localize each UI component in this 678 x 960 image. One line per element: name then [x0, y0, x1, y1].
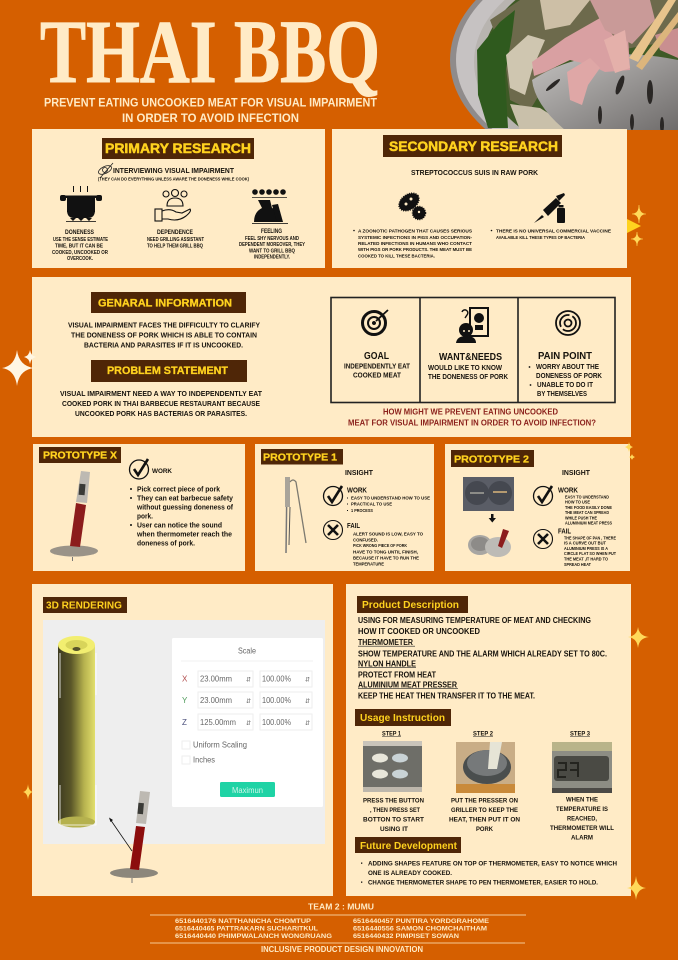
heading: prototype 1 — [261, 449, 343, 464]
step 1: STEP 1 — [382, 732, 402, 738]
axis row y: ⇵ — [305, 699, 310, 705]
text: dependence: NEED GRILLING ASSISTANT — [147, 237, 205, 243]
text: member names left: 6516440176 NATTHANICHA CHOMTUP — [175, 918, 312, 925]
list: future development — [361, 860, 617, 886]
text: pathogen bullet — [353, 228, 473, 260]
subtitle: IN ORDER TO AVOID INFECTION — [122, 113, 299, 125]
text: step 3: ALARM — [571, 834, 593, 842]
text: general information: VISUAL IMPAIRMENT FACES THE DIFFICULTY TO CLARIFY — [68, 320, 260, 330]
arrow: model to product — [109, 818, 132, 851]
heading: prototype x — [39, 447, 121, 463]
text: product description: ALUMINIUM MEAT PRESSER — [358, 680, 457, 690]
text: general information: THE DONENESS OF PORK WHICH IS ABLE TO CONTAIN — [71, 330, 257, 340]
heading: 3d rendering: 3D RENDERING — [46, 600, 122, 612]
text: fail list: THE MEAT ,IT HARD TO — [564, 556, 608, 562]
text: vaccine bullet: THERE IS NO UNIVERSAL COMMERCIAL VACCINE — [496, 228, 612, 234]
icon: check — [130, 459, 148, 479]
text: goal: COOKED MEAT — [353, 372, 402, 380]
icon: syringe and vial — [534, 193, 565, 223]
text: dependence — [147, 229, 205, 250]
sparkles: right and left yellow — [23, 627, 649, 900]
text: product description: KEEP THE HEAT THEN TRANSFER IT TO THE MEAT. — [358, 692, 535, 700]
icon: bacteria — [396, 190, 426, 220]
step 3 — [550, 732, 614, 842]
text: how might we — [348, 408, 596, 428]
text: wants and needs: THE DONENESS OF PORK — [428, 374, 508, 381]
heading: primary research — [102, 138, 254, 159]
checkbox options — [182, 740, 247, 764]
text: insight: INSIGHT — [345, 468, 373, 477]
heading: primary research: PRIMARY RESEARCH — [105, 141, 251, 156]
text: step 2: PORK — [476, 826, 493, 833]
text: interviewing: INTERVIEWING VISUAL IMPAIRMENT — [113, 166, 234, 175]
screenshot: slicer view — [43, 620, 325, 844]
text: fail list: ALUMINIUM PRESS IS A — [564, 546, 609, 551]
text: wants and needs: WOULD LIKE TO KNOW — [428, 365, 502, 372]
text: feeling: INDEPENDENTLY. — [254, 254, 290, 260]
text: pathogen bullet: RELATED INFECTIONS IN HUMANS WHO CONTACT — [358, 241, 472, 247]
list: prototype x findings: when thermometer reach the — [136, 530, 232, 538]
text: feeling: FEEL SHY NERVOUS AND — [245, 236, 299, 242]
heading: secondary research — [383, 135, 562, 157]
text: member names right: 6516440432 PIMPISET SOWAN — [353, 933, 459, 940]
photo: thermometer buttons — [363, 741, 422, 792]
text: dependence: TO HELP THEM GRILL BBQ — [147, 244, 203, 250]
text: work list: HOW TO USE — [565, 500, 590, 504]
text: course name: INCLUSIVE PRODUCT DESIGN INNOVATION — [261, 945, 423, 954]
text: member names right: 6516440457 PUNTIRA YORDGRAHOME — [353, 918, 489, 925]
text: doneness: COOKED, UNCOOKED OR — [52, 250, 108, 256]
heading: problem statement — [91, 360, 247, 382]
text: step 1: PRESS THE BUTTON — [363, 798, 424, 804]
panel: prototype x — [33, 444, 245, 571]
text: product description: HOW IT COOKED OR UNCOOKED — [358, 627, 480, 636]
text: pain point — [529, 351, 602, 398]
text: work list: EASY TO UNDERSTAND — [565, 494, 610, 500]
text: feeling: FEELING — [261, 228, 282, 235]
text: product description: PROTECT FROM HEAT — [358, 670, 436, 680]
heading: general information: GENARAL INFORMATION — [98, 298, 232, 310]
photo: thermometer prototype — [50, 471, 98, 561]
text: product description: SHOW TEMPERATURE AND THE ALARM WHICH ALREADY SET TO 80C. — [358, 650, 607, 658]
text: how might we: HOW MIGHT WE PREVENT EATING UNCOOKED — [383, 408, 558, 416]
step 3: STEP 3 — [570, 732, 591, 738]
text: work list — [558, 486, 612, 526]
text: fail list: PICK WRONG PIECE OF PORK — [353, 543, 407, 549]
text: pathogen bullet: WITH PIGS OR PORK PRODUCTS. THE MEAT MUST BE — [358, 247, 473, 253]
text: work list: 1 PROCESS — [351, 508, 374, 514]
list: prototype x findings: They can eat barbecue safety — [137, 494, 233, 502]
panel: prototype 2 — [445, 444, 630, 571]
axis row y: 100.00% — [262, 696, 291, 705]
text: doneness — [52, 229, 108, 262]
title: THAI BBQ — [40, 3, 380, 102]
scale settings card — [172, 638, 323, 807]
text: fail list: CONFUSED. — [353, 538, 378, 544]
panel: primary research — [32, 129, 325, 268]
heading: secondary research: SECONDARY RESEARCH — [389, 139, 558, 154]
text: doneness: USE THE SENSE ESTIMATE — [53, 237, 108, 243]
text: fail list: BECAUSE IT HAVE TO RUN THE — [353, 556, 420, 562]
heading: prototype 2: PROTOTYPE 2 — [454, 454, 529, 466]
text: general information: BACTERIA AND PARASITES IF IT IS UNCOOKED. — [84, 340, 243, 350]
text: pain point: BY THEMSELVES — [537, 391, 587, 398]
list: future development: CHANGE THERMOMETER SHAPE TO PEN THERMOMETER, EASIER TO HOLD. — [368, 880, 598, 886]
icon: eye crossed — [97, 163, 113, 178]
heading: 3d rendering — [43, 597, 127, 613]
text: pathogen bullet: COOKED TO KILL THESE BACTERIA. — [358, 254, 436, 260]
text: streptococcus: STREPTOCOCCUS SUIS IN RAW PORK — [411, 168, 539, 177]
text: problem statement: UNCOOKED PORK HAS BACTERIAS OR PARASITES. — [75, 409, 247, 418]
list: prototype x findings: pork. — [137, 512, 153, 520]
text: fail list — [558, 526, 616, 567]
text: step 3: THERMOMETER WILL — [550, 825, 614, 832]
text: pain point: PAIN POINT — [538, 351, 592, 362]
heading: usage instruction — [355, 709, 451, 726]
text: step 1 — [363, 798, 425, 833]
text: work list — [347, 486, 431, 514]
axis row y: 23.00mm — [200, 696, 232, 705]
text: step 2: HEAT, THEN PUT IT ON — [449, 816, 520, 824]
photo: temperature display — [552, 742, 612, 793]
text: member names right: 6516440556 SAMON CHOMCHAITHAM — [353, 926, 487, 932]
text: step 2: GRILLER TO KEEP THE — [451, 807, 518, 814]
text: vaccine bullet — [491, 228, 612, 241]
photo: grill with raw pork — [450, 0, 678, 130]
text: wants and needs — [428, 352, 508, 381]
axis row z: 125.00mm — [200, 718, 236, 727]
photo: meat press on grill — [463, 477, 514, 511]
text: goal: GOAL — [364, 351, 389, 362]
text: dependence: DEPENDENCE — [157, 229, 193, 236]
text: pain point: UNABLE TO DO IT — [537, 382, 594, 389]
text: fail list: HAVE TO TONG UNTIL FINISH, — [353, 550, 419, 556]
text: interviewing — [98, 166, 249, 182]
text: member names right — [353, 918, 489, 940]
axis row z: ⇵ — [305, 721, 310, 727]
text: fail list: FAIL — [558, 526, 571, 536]
text: work label: WORK — [152, 469, 173, 475]
axis row z — [182, 714, 312, 730]
text: product description: USING FOR MEASURING TEMPERATURE OF MEAT AND CHECKING — [358, 616, 591, 625]
text: problem statement: VISUAL IMPAIRMENT NEED A WAY TO INDEPENDENTLY EAT — [60, 389, 262, 398]
heading: usage instruction: Usage Instruction — [360, 712, 445, 724]
text: interviewing: (THEY CAN DO EVERYTHING UNLESS AWARE THE DONENESS WHILE COOK) — [98, 176, 249, 182]
text: general information — [68, 320, 260, 350]
text: fail list: FAIL — [347, 521, 360, 530]
icon: anxious person — [252, 189, 288, 224]
axis row y: Y — [182, 696, 188, 705]
text: goal: INDEPENDENTLY EAT — [344, 364, 411, 370]
text: fail list: SPREAD HEAT — [564, 562, 591, 567]
text: doneness: TIME, BUT IT CAN BE — [55, 244, 103, 250]
text: problem statement: COOKED PORK IN THAI BARBECUE RESTAURANT BECAUSE — [62, 399, 260, 408]
icon: check — [324, 486, 342, 506]
photo: aluminium press — [468, 529, 511, 557]
checkbox options: Inches — [193, 756, 215, 764]
panel: problem definition — [32, 277, 631, 437]
axis row x: ⇵ — [305, 678, 310, 684]
step 1 — [363, 732, 425, 833]
icon: check — [534, 486, 552, 506]
text: work list: WORK — [347, 486, 367, 494]
text: fail list: THE SHAPE OF PAN , THERE — [564, 536, 616, 540]
list: future development: ADDING SHAPES FEATURE ON TOP OF THERMOMETER, EASY TO NOTICE WHICH — [368, 860, 617, 868]
text: step 3: REACHED, — [567, 816, 597, 822]
axis row z: ⇵ — [246, 721, 251, 727]
icon: cross — [534, 530, 552, 548]
text: product description: THERMOMETER — [358, 638, 413, 647]
text: product description — [358, 616, 607, 700]
subtitle — [44, 98, 377, 125]
heading: future development: Future Development — [360, 840, 457, 852]
text: fail list: TEMPERATURE — [353, 562, 385, 568]
photo: tongs — [285, 477, 306, 553]
axis row y: ⇵ — [246, 699, 251, 705]
text: pain point: WORRY ABOUT THE — [536, 364, 599, 371]
text: step 1: , THEN PRESS SET — [370, 807, 421, 814]
icon: helping hand with people — [155, 190, 190, 221]
heading: problem statement: PROBLEM STATEMENT — [107, 365, 228, 377]
text: how might we: MEAT FOR VISUAL IMPAIRMENT IN ORDER TO AVOID INFECTION? — [348, 418, 596, 428]
panel: 3d rendering — [32, 584, 333, 896]
text: step 1: USING IT — [380, 826, 409, 833]
axis row x: 100.00% — [262, 674, 291, 684]
text: team name: TEAM 2 : MUMU — [308, 902, 374, 912]
text: product description: NYLON HANDLE — [358, 660, 416, 668]
list: prototype x findings: without guessing doneness of — [136, 504, 234, 512]
icon: cross — [324, 520, 342, 540]
text: step 2: PUT THE PRESSER ON — [451, 798, 518, 804]
sparkles: right of secondary research — [627, 205, 646, 246]
text: member names left: 6516440465 PATTRAKARN SUCHARITKUL — [175, 926, 318, 932]
heading: product description: Product Description — [362, 599, 459, 611]
maximum button: Maximun — [232, 786, 263, 795]
text: vaccine bullet: AVAILABLE KILL THESE TYPES OF BACTERIA — [496, 235, 585, 241]
text: goal — [344, 351, 411, 380]
axis row z: Z — [182, 718, 187, 727]
scale settings card: Scale — [238, 646, 256, 656]
text: member names left — [175, 918, 332, 940]
footer: team credits — [150, 902, 526, 954]
icon: down arrow — [489, 514, 496, 522]
table: goal, wants, pain point — [331, 298, 615, 402]
axis row x: X — [182, 674, 188, 684]
step 2 — [449, 732, 520, 833]
text: fail list: CIRCLE FLAT SO WHEN PUT — [564, 551, 616, 556]
heading: prototype x: PROTOTYPE X — [43, 450, 117, 462]
text: wants and needs: WANT&NEEDS — [439, 352, 502, 363]
heading: prototype 2 — [451, 450, 534, 467]
heading: prototype 1: PROTOTYPE 1 — [263, 452, 337, 464]
text: pathogen bullet: SYSTEMIC INFECTIONS IN PIGS AND OCCUPATION- — [358, 235, 472, 241]
list: prototype x findings — [130, 486, 234, 548]
list: prototype x findings: User can notice the sound — [137, 522, 222, 530]
text: fail list: ALERT SOUND IS LOW, EASY TO — [353, 532, 423, 538]
3d model: yellow cylinder — [58, 636, 96, 828]
text: step 3: TEMPERATURE IS — [556, 806, 608, 813]
text: work list: PRACTICAL TO USE — [351, 502, 393, 508]
axis row x: ⇵ — [246, 678, 251, 684]
axis row x — [182, 671, 312, 687]
maximum button — [220, 782, 275, 797]
photo: presser on griller — [456, 742, 515, 793]
text: feeling: DEPENDENT MOREOVER, THEY — [239, 242, 305, 248]
text: feeling: WANT TO GRILL BBQ — [249, 248, 295, 254]
text: pathogen bullet: A ZOONOTIC PATHOGEN THAT CAUSES SERIOUS — [358, 228, 473, 234]
list: prototype x findings: doneness of pork. — [137, 540, 195, 548]
axis row z: 100.00% — [262, 718, 291, 727]
subtitle: PREVENT EATING UNCOOKED MEAT FOR VISUAL IMPAIRMENT — [44, 98, 377, 110]
text: step 3 — [550, 796, 614, 842]
axis row y — [182, 692, 312, 708]
text: insight: INSIGHT — [562, 468, 590, 477]
panel: prototype 1 — [255, 444, 434, 571]
icon: target — [362, 310, 388, 334]
text: fail list: IS A CURVE OUT BUT — [564, 540, 606, 546]
text: step 3: WHEN THE — [566, 796, 598, 804]
text: work list: WHILE PUSH THE — [565, 516, 597, 520]
icon: concentric circles — [556, 311, 580, 335]
icon: person thinking — [456, 308, 488, 343]
sparkles: left white — [2, 350, 36, 386]
icon: cooking pot — [60, 186, 102, 222]
heading: product description — [357, 596, 468, 613]
text: work list: THE FOOD EASILY DONE — [565, 505, 612, 510]
panel: secondary research — [332, 129, 627, 268]
text: feeling — [239, 228, 305, 260]
sparkles: top right of prototype 2 — [625, 442, 635, 460]
panel: product information — [346, 584, 631, 896]
step 2: STEP 2 — [473, 732, 494, 738]
text: work list: WORK — [558, 486, 578, 494]
text: doneness: OVERCOOK. — [67, 256, 93, 262]
text: pain point: DONENESS OF PORK — [536, 373, 602, 380]
text: work list: ALUMINIUM MEAT PRESS — [565, 520, 612, 526]
list: future development: ONE IS ALREADY COOKED. — [368, 870, 452, 877]
text: doneness: DONENESS — [65, 229, 94, 236]
text: member names left: 6516440440 PHIMPWALANCH WONGRUANG — [175, 933, 332, 940]
axis row x: 23.00mm — [200, 674, 232, 684]
text: step 2 — [449, 798, 520, 833]
text: step 1: BOTTON TO START — [363, 816, 425, 824]
list: prototype x findings: Pick correct piece of pork — [137, 486, 220, 494]
heading: general information — [91, 292, 246, 313]
text: work list: THE MEAT CAN SPREAD — [565, 510, 610, 515]
text: fail list — [347, 521, 423, 568]
checkbox options: Uniform Scaling — [193, 740, 247, 750]
text: problem statement — [60, 389, 262, 418]
text: work list: EASY TO UNDERSTAND HOW TO USE — [351, 496, 431, 502]
photo: thermometer product — [110, 791, 158, 883]
